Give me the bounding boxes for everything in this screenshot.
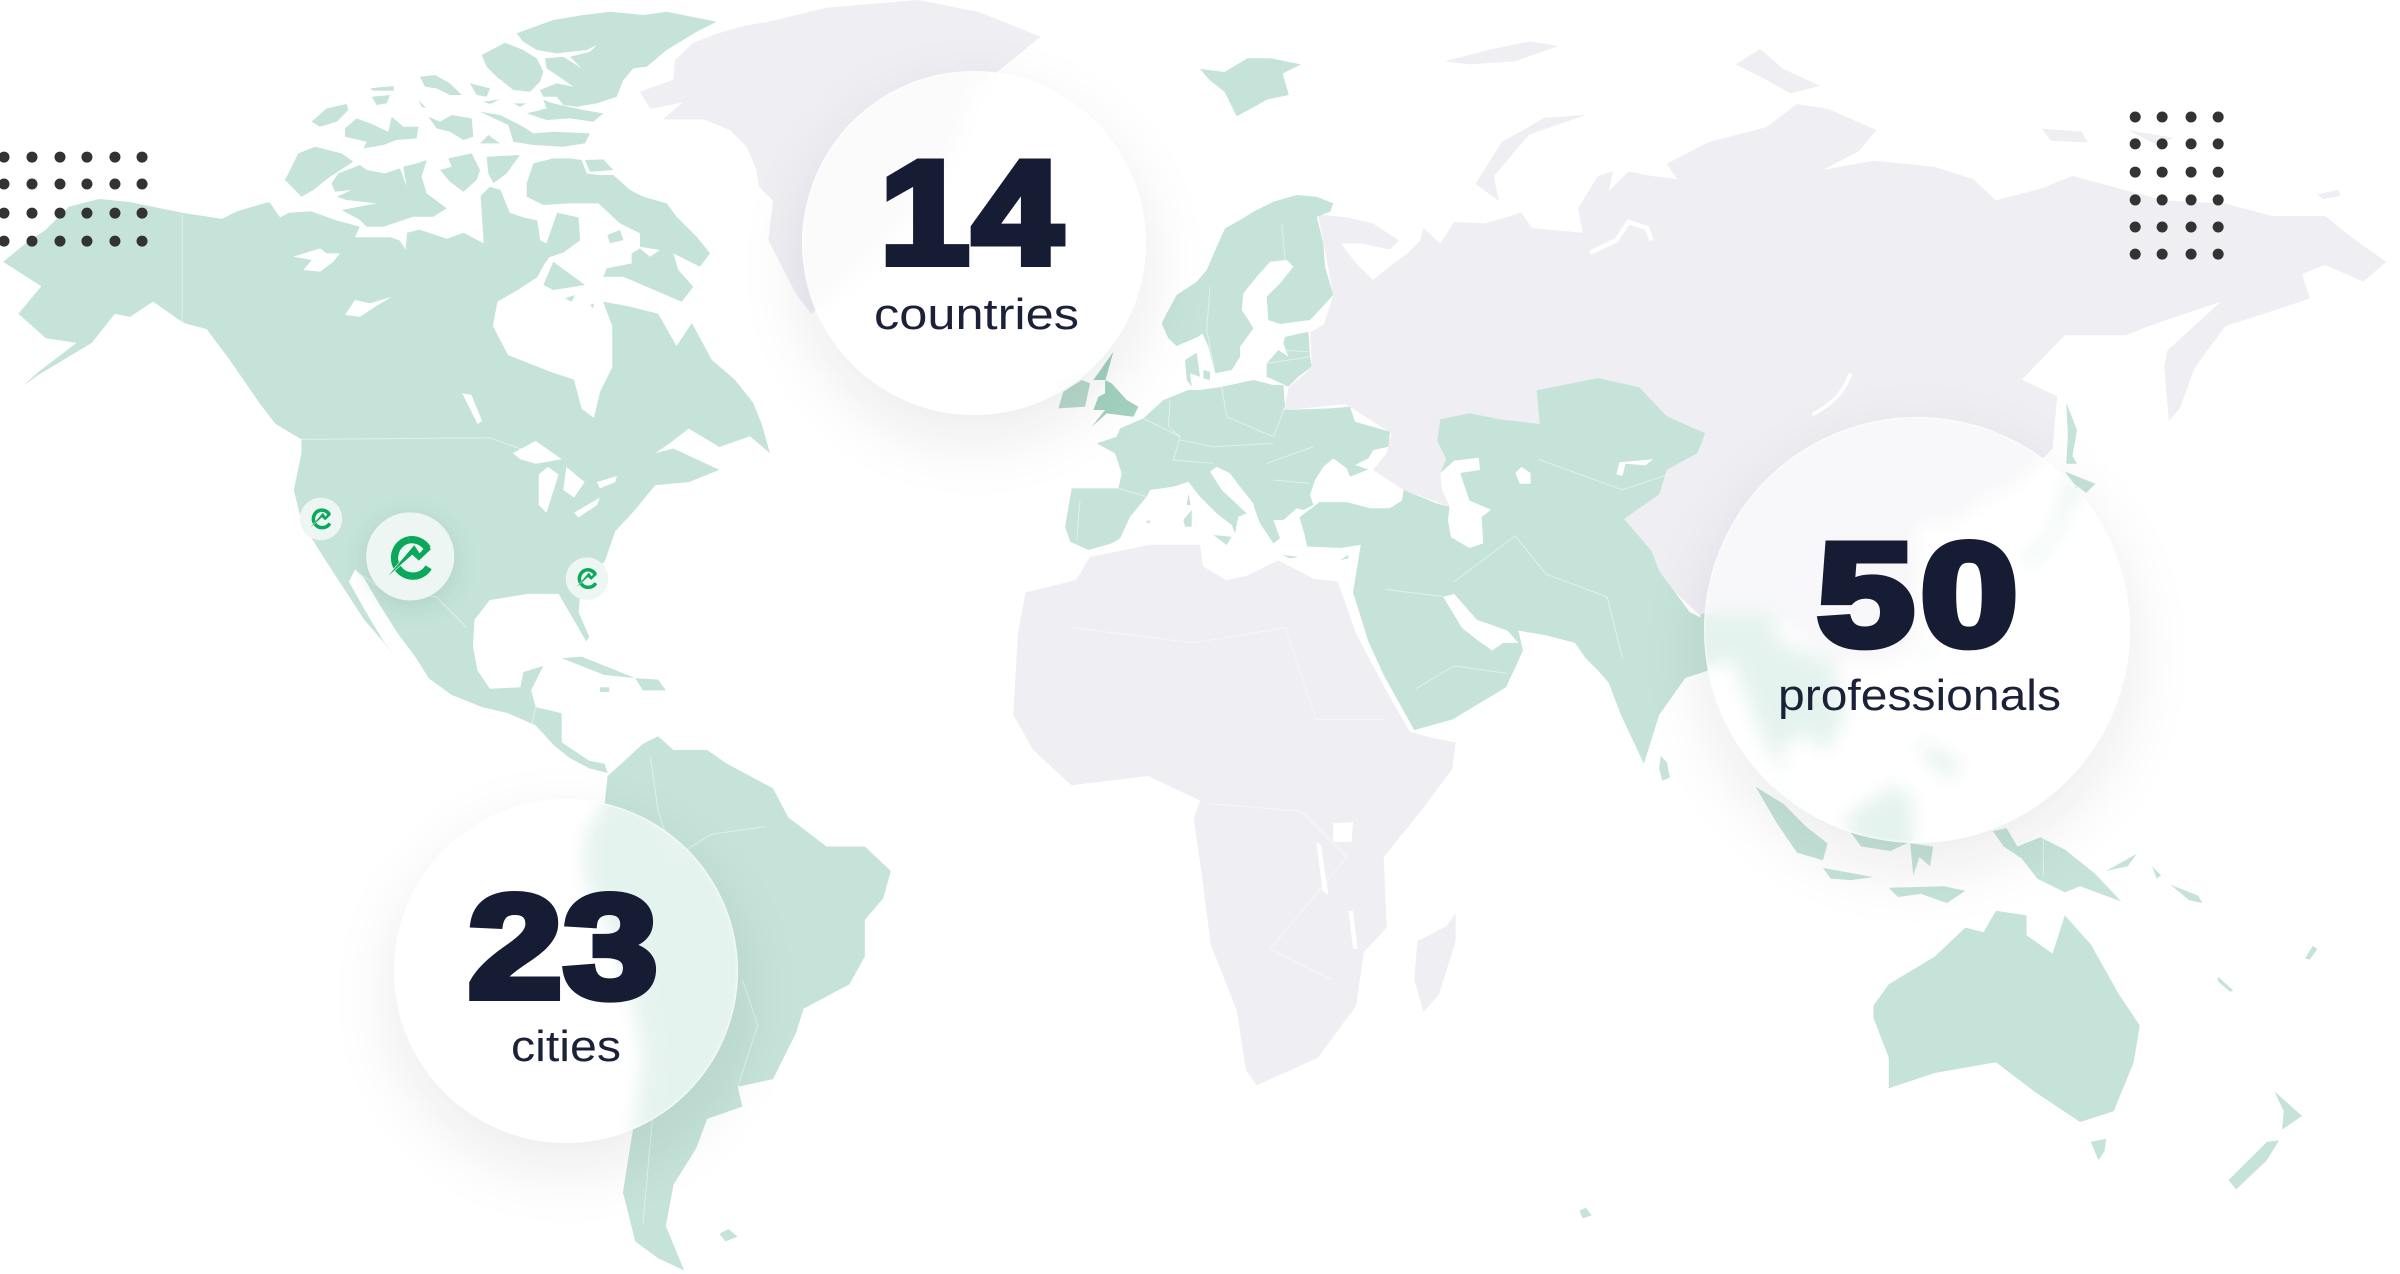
Russia and China xyxy=(1284,104,2386,663)
Continental Europe and Ukraine xyxy=(1065,380,1390,550)
small Hudson Bay islands xyxy=(565,295,575,302)
Corsica xyxy=(1187,493,1191,505)
stat label: professionals: professionals xyxy=(1778,671,2061,720)
stat number: 50: 50 xyxy=(1817,514,2024,677)
Cuba xyxy=(562,657,635,678)
Great Slave Lake xyxy=(345,297,392,317)
Africa xyxy=(1013,545,1456,1085)
Persian Gulf xyxy=(1443,594,1518,651)
Southeast Asia xyxy=(1701,614,1846,776)
Solomon Islands xyxy=(2106,854,2137,871)
Lake Ontario xyxy=(597,476,617,488)
Borneo xyxy=(1843,784,1913,851)
Aral Sea xyxy=(1515,467,1531,484)
Ireland xyxy=(1058,380,1090,408)
Tasmania xyxy=(2091,1139,2106,1160)
Lesser Sunda Islands xyxy=(1889,886,1965,903)
Philippines xyxy=(1913,739,1961,781)
Hispaniola xyxy=(635,678,666,690)
Lake Superior xyxy=(513,441,562,464)
Greenland xyxy=(640,0,1041,314)
Crete xyxy=(1282,555,1298,558)
Europe group xyxy=(1058,195,1390,560)
Scandinavia xyxy=(1162,195,1333,373)
Somerset Island xyxy=(487,155,520,183)
Fiji xyxy=(2305,946,2317,960)
Mallorca xyxy=(1145,520,1150,523)
Lake Balkhash xyxy=(1616,459,1653,476)
river and lake lines xyxy=(1590,222,1851,415)
Ellesmere Island xyxy=(517,12,717,107)
New Guinea xyxy=(1993,828,2121,902)
Lake Erie xyxy=(574,497,600,517)
Victoria Island xyxy=(332,160,447,227)
Japan xyxy=(2017,487,2077,560)
Prince Charles Island xyxy=(607,230,623,243)
Denmark xyxy=(1185,353,1200,387)
Prince of Wales Island xyxy=(440,153,480,192)
pin: large logo marker xyxy=(366,512,454,600)
Great Bear Lake xyxy=(293,248,340,272)
Baltic states xyxy=(1267,332,1312,387)
water cut-outs in gray land xyxy=(1316,822,1358,949)
Devon Island xyxy=(480,112,590,147)
Sakhalin xyxy=(2066,403,2077,464)
Svalbard xyxy=(1200,58,1301,116)
European borders xyxy=(1077,223,1313,540)
Lake Michigan xyxy=(539,467,559,513)
Sicily xyxy=(1213,535,1232,545)
Novaya Zemlya xyxy=(1476,115,1586,201)
Ob gulf xyxy=(1590,222,1652,253)
small island xyxy=(1580,1208,1592,1218)
Hokkaido xyxy=(2065,471,2095,493)
pin: west coast logo marker xyxy=(300,498,342,540)
stat label: countries: countries xyxy=(874,290,1079,339)
United Kingdom xyxy=(1092,352,1138,427)
Baikal xyxy=(1812,374,1851,415)
dot grid: top left xyxy=(0,152,148,247)
Lake Winnipeg xyxy=(462,393,482,424)
New Caledonia xyxy=(2218,977,2233,992)
South America xyxy=(585,736,891,1270)
water cut-outs in green land xyxy=(293,248,1653,651)
New Zealand xyxy=(2274,1091,2302,1130)
Jamaica xyxy=(600,687,609,692)
Prince Patrick Island xyxy=(312,104,348,127)
North and Central America xyxy=(3,187,770,773)
stat circle: 50 professionals xyxy=(1704,417,2130,843)
Sumatra xyxy=(1756,787,1828,860)
Sulawesi xyxy=(1910,843,1933,876)
dot grid: top right xyxy=(2130,111,2224,260)
stat circle: 14 countries xyxy=(802,71,1146,415)
Madagascar xyxy=(1414,914,1456,1012)
country borders xyxy=(182,214,2043,1225)
Taiwan xyxy=(1919,647,1933,660)
Sri Lanka xyxy=(1659,756,1670,781)
Lake Victoria xyxy=(1333,822,1353,842)
Canadian lakes xyxy=(293,248,392,317)
stat circle: 23 cities xyxy=(394,799,738,1143)
land not covered: gray countries xyxy=(640,0,2386,1085)
Axel Heiberg Island xyxy=(482,43,543,92)
small northern islands xyxy=(470,83,490,97)
Java xyxy=(1823,868,1873,880)
Southampton Island xyxy=(543,262,585,290)
Lake Malawi xyxy=(1348,911,1358,949)
Lake Huron xyxy=(563,467,585,497)
Australia xyxy=(1873,911,2140,1122)
Melville Island xyxy=(345,117,418,148)
Arctic islands xyxy=(1736,49,1820,93)
pin: east coast logo marker xyxy=(566,557,608,600)
Cyprus xyxy=(1340,555,1348,560)
Lake Tanganyika xyxy=(1316,842,1329,895)
Middle East, Central and South Asia xyxy=(1299,378,1708,764)
Bathurst Island xyxy=(428,115,473,140)
Sardinia xyxy=(1183,510,1192,527)
Falklands xyxy=(719,1229,738,1241)
stat label: cities: cities xyxy=(511,1022,621,1071)
Canadian Arctic archipelago xyxy=(285,12,717,308)
Baffin Island xyxy=(527,158,710,302)
stat number: 23: 23 xyxy=(468,865,659,1028)
Banks Island xyxy=(285,147,353,197)
stat number: 14: 14 xyxy=(880,131,1065,294)
Caspian Sea xyxy=(1440,458,1491,548)
